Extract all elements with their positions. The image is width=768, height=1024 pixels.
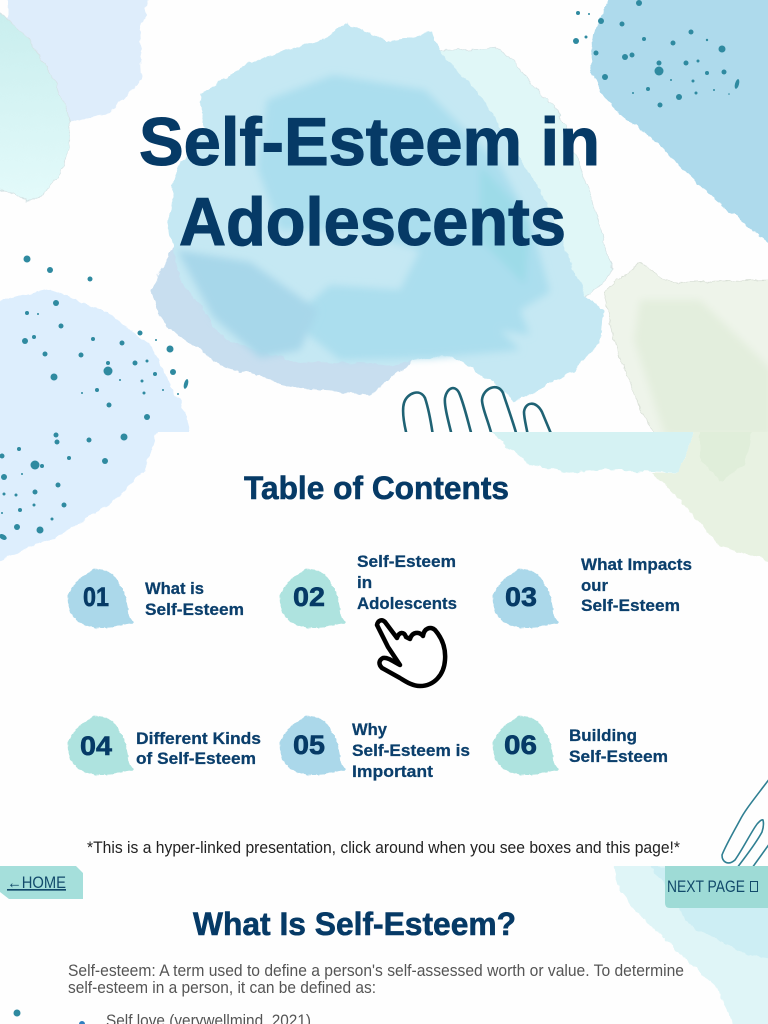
item 05: Why — [352, 720, 388, 739]
item 01: Self-Esteem — [145, 600, 244, 619]
icon: pointing hand cursor — [377, 620, 445, 686]
item 06: 06 — [504, 730, 537, 760]
item 02: Self-Esteem — [357, 552, 456, 571]
panel: table of contents — [0, 428, 768, 868]
watercolor blob: lower right — [612, 862, 768, 1024]
item 02 — [280, 552, 457, 628]
panel: what is self-esteem — [0, 862, 768, 1024]
watercolor blobs: contents background — [0, 428, 768, 562]
splatter dots: top right — [573, 0, 740, 108]
button: next page: NEXT PAGE — [667, 878, 745, 896]
decorative dot — [14, 1010, 20, 1016]
body text: definition: self-esteem in a person, it can be defined as: — [68, 979, 376, 997]
body text: definition — [68, 962, 684, 997]
watercolor blobs: cover background — [0, 0, 768, 436]
item 03: our — [581, 576, 608, 595]
icon: hand outline lower right — [722, 778, 768, 868]
item 02: Adolescents — [357, 594, 457, 613]
splatter dots: lower left — [22, 256, 189, 420]
item 05: 05 — [293, 730, 325, 760]
button: next page — [665, 866, 768, 908]
item 02: 02 — [293, 582, 325, 612]
icon: hand outline fingers — [403, 387, 552, 436]
item 04: of Self-Esteem — [136, 749, 256, 768]
splatter dots: contents top left — [0, 432, 128, 541]
item 05 — [280, 716, 470, 781]
item 03: Self-Esteem — [581, 596, 680, 615]
panel: title cover — [0, 0, 768, 436]
item 06: Self-Esteem — [569, 747, 668, 766]
item 04 — [68, 716, 261, 775]
item 04: Different Kinds — [136, 729, 261, 748]
item 04: 04 — [80, 731, 112, 761]
body text: definition: Self-esteem: A term used to define a person's self-assessed worth or value. To determine — [68, 962, 684, 980]
title: Adolescents — [179, 184, 566, 260]
item 03: What Impacts — [581, 555, 692, 574]
item 01: What is — [145, 579, 204, 598]
heading: table of contents: Table of Contents — [244, 470, 509, 506]
title — [140, 116, 596, 246]
item 03 — [493, 555, 692, 628]
item 05: Self-Esteem is — [352, 741, 470, 760]
item 02: in — [357, 573, 372, 592]
item 01 — [68, 569, 244, 628]
note: hyperlink instructions: *This is a hyper-linked presentation, click around when you see boxes and this page!* — [87, 839, 681, 857]
button: home — [0, 866, 83, 899]
item 06: Building — [569, 726, 637, 745]
button: home: ←HOME — [7, 874, 66, 892]
item 03: 03 — [505, 582, 537, 612]
item 01: 01 — [83, 582, 109, 612]
heading: what is self-esteem: What Is Self-Esteem? — [193, 906, 516, 942]
title: Self-Esteem in — [139, 104, 600, 180]
item 06 — [493, 716, 668, 775]
item 05: Important — [352, 762, 433, 781]
